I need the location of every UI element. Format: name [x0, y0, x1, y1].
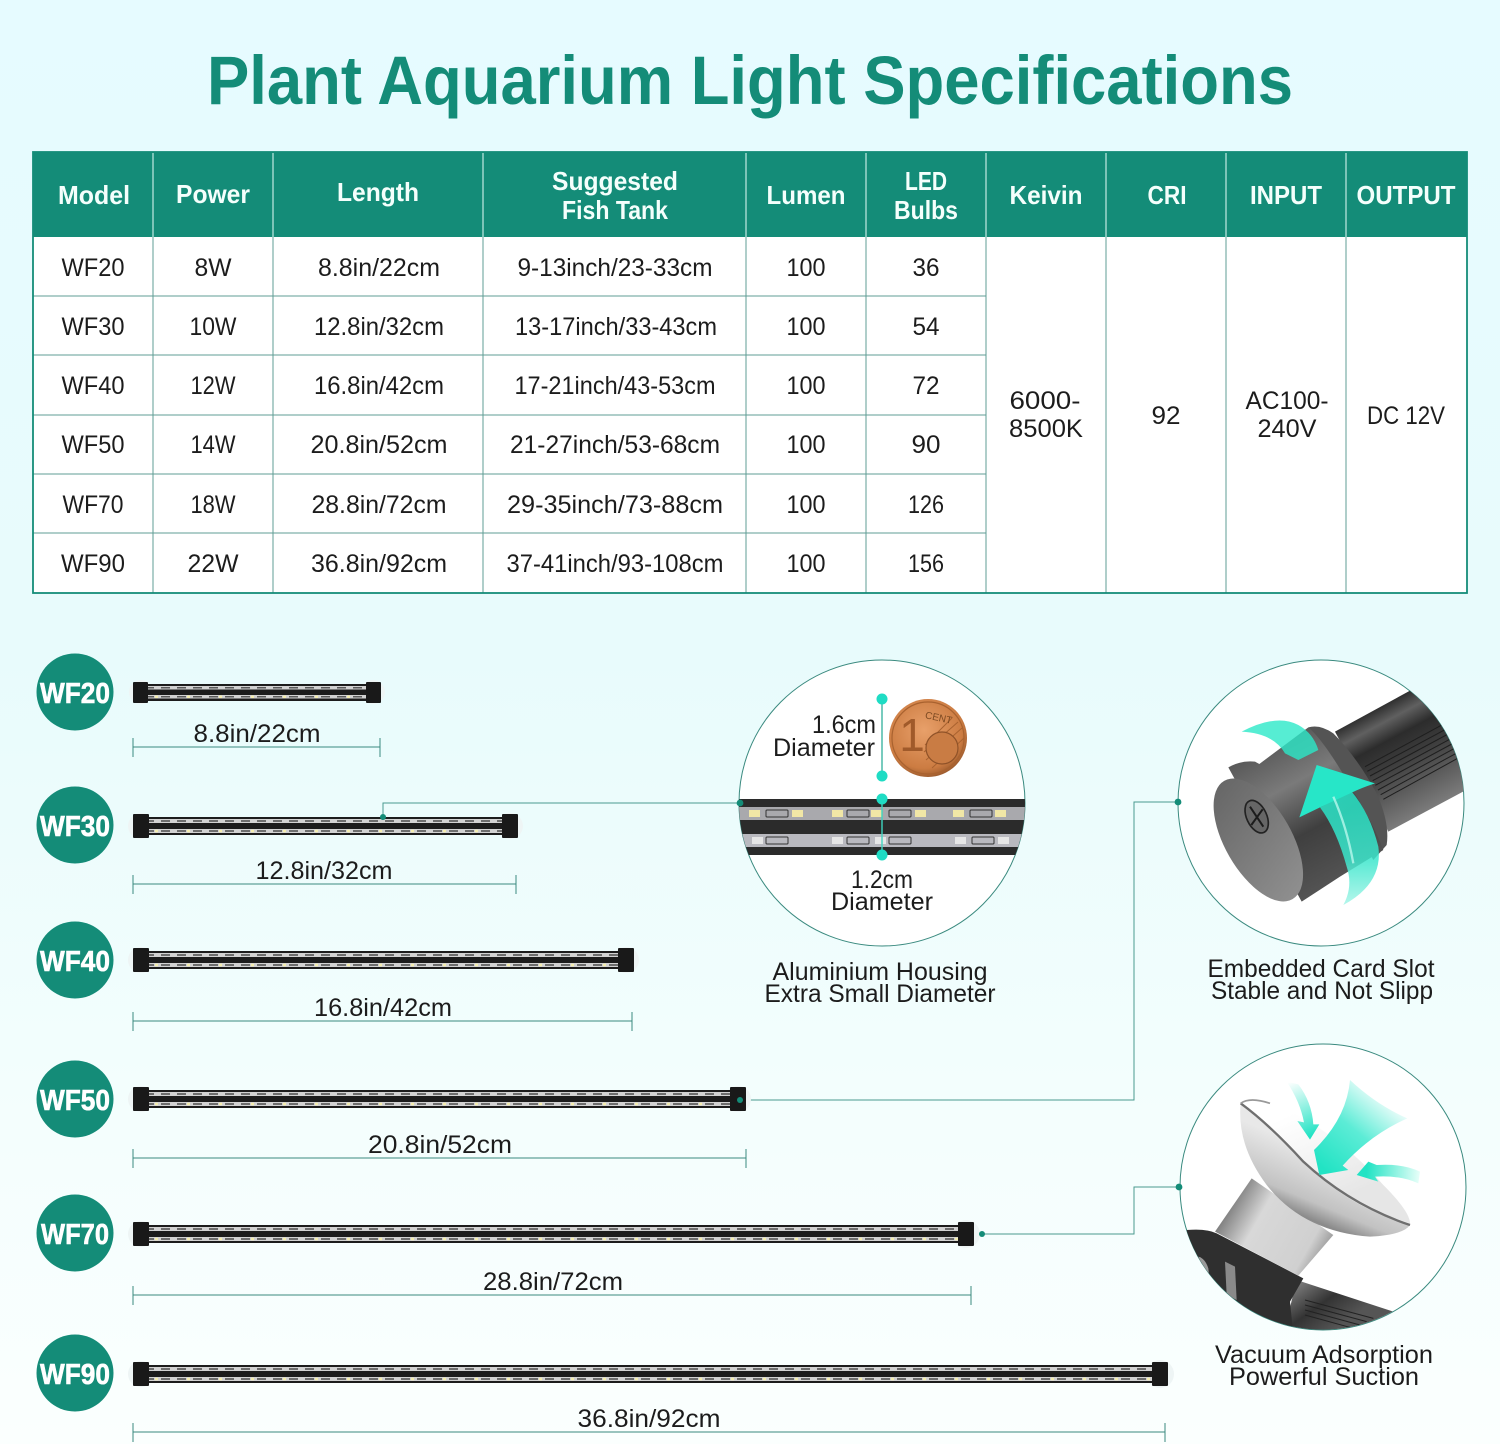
table header labels: Fish Tank	[562, 195, 668, 225]
connector dot	[737, 800, 743, 806]
table data rows: 29-35inch/73-88cm	[507, 491, 723, 519]
table data rows: WF70	[62, 491, 124, 519]
dimension: WF90	[133, 1405, 1165, 1442]
table data rows: WF20	[62, 254, 124, 282]
dimension: WF70: 28.8in/72cm	[483, 1268, 623, 1296]
table data rows: 8.8in/22cm	[318, 254, 440, 282]
model row: WF40	[36, 922, 639, 1031]
caption: vacuum adsorption	[1215, 1341, 1433, 1391]
light bar: WF20	[129, 680, 385, 704]
table data rows: 22W	[188, 550, 239, 578]
table data rows: 16.8in/42cm	[314, 372, 444, 400]
marker dot: WF30	[380, 814, 386, 820]
merged cell: Kelvin: 6000-	[1010, 387, 1080, 415]
badge: WF30	[36, 786, 114, 864]
end cap illustration	[1214, 691, 1464, 902]
table data rows	[61, 254, 944, 578]
merged cell: Kelvin	[1009, 387, 1083, 443]
table header labels: Model	[58, 180, 130, 210]
suction cup illustration	[1187, 1100, 1410, 1335]
table data rows: 126	[908, 491, 944, 519]
caption: aluminium housing: Aluminium Housing	[772, 958, 988, 986]
table data rows: 9-13inch/23-33cm	[518, 254, 712, 282]
label: 1.6cm diameter: 1.6cm	[812, 711, 876, 739]
coin	[889, 699, 967, 777]
table data rows: 100	[786, 372, 826, 400]
marker dot: WF50	[737, 1097, 743, 1103]
badge: WF20	[36, 654, 114, 730]
dimension: WF50	[133, 1131, 746, 1168]
table header labels: Keivin	[1010, 180, 1082, 210]
dimension: WF70	[133, 1268, 971, 1305]
model row: WF20	[36, 654, 385, 757]
table header labels	[58, 166, 1456, 225]
connector dot	[1175, 799, 1181, 805]
label: 1.6cm diameter	[773, 711, 876, 762]
table header labels: Lumen	[766, 180, 846, 210]
light bar: WF50	[128, 1086, 751, 1112]
measurement markers	[876, 694, 888, 860]
model row: WF70	[36, 1194, 985, 1305]
merged cell: input: AC100-	[1246, 387, 1328, 415]
merged cell: input	[1246, 387, 1328, 443]
rotation arrow	[1242, 720, 1379, 905]
close-up of light bar	[735, 799, 1030, 855]
caption: embedded card slot: Stable and Not Slipp	[1211, 977, 1433, 1005]
table data rows: 17-21inch/43-53cm	[514, 372, 716, 400]
caption: aluminium housing	[764, 958, 996, 1008]
light bar: WF70	[128, 1220, 980, 1248]
table header labels: Length	[337, 177, 419, 207]
dimension: WF30: 12.8in/32cm	[256, 857, 392, 885]
dimension: WF40	[133, 994, 632, 1031]
badge: WF50: WF50	[40, 1085, 110, 1117]
label: 1.2cm diameter: 1.2cm	[851, 866, 913, 894]
merged cell: input: 240V	[1258, 415, 1317, 443]
merged cell: CRI: 92	[1152, 402, 1180, 430]
dimension: WF20: 8.8in/22cm	[194, 720, 320, 748]
badge: WF50	[36, 1060, 114, 1138]
caption: embedded card slot	[1208, 955, 1435, 1005]
merged cell: Kelvin: 8500K	[1009, 415, 1083, 443]
table data rows: 28.8in/72cm	[312, 491, 446, 519]
table data rows: 12W	[190, 372, 236, 400]
label: 1.2cm diameter	[831, 866, 933, 916]
label: 1.2cm diameter: Diameter	[831, 888, 933, 916]
merged cell: output: DC 12V	[1367, 402, 1445, 430]
caption: embedded card slot: Embedded Card Slot	[1208, 955, 1435, 983]
table data rows: 100	[786, 313, 826, 341]
badge: WF20: WF20	[40, 678, 110, 710]
table data rows: WF90	[61, 550, 125, 578]
table data rows: WF50	[62, 431, 124, 459]
table data rows: 36	[912, 254, 940, 282]
badge: WF30: WF30	[40, 811, 110, 843]
table data rows: 100	[786, 431, 826, 459]
table header labels: LED	[905, 166, 947, 196]
table data rows: 36.8in/92cm	[311, 550, 447, 578]
badge: WF90: WF90	[40, 1359, 110, 1391]
table data rows: 37-41inch/93-108cm	[506, 550, 724, 578]
table data rows: 21-27inch/53-68cm	[510, 431, 720, 459]
light bar: WF90	[128, 1360, 1174, 1388]
detail circle: embedded card slot	[1175, 660, 1482, 946]
table header labels: INPUT	[1250, 180, 1322, 210]
badge: WF70: WF70	[41, 1219, 109, 1251]
model row: WF50	[36, 1060, 751, 1168]
table data rows: 10W	[190, 313, 237, 341]
coin: CENT	[924, 710, 953, 727]
title: Plant Aquarium Light Specifications	[207, 42, 1293, 119]
caption: vacuum adsorption: Powerful Suction	[1229, 1363, 1419, 1391]
connector lines	[383, 802, 1179, 1234]
connector dot	[1176, 1184, 1182, 1190]
badge: WF70	[36, 1194, 114, 1272]
model row: WF90	[36, 1334, 1174, 1442]
marker dot: WF70	[979, 1231, 985, 1237]
caption: aluminium housing: Extra Small Diameter	[764, 980, 996, 1008]
detail circle: vacuum adsorption	[1176, 1044, 1466, 1335]
dimension: WF40: 16.8in/42cm	[314, 994, 452, 1022]
dimension: WF50: 20.8in/52cm	[368, 1131, 512, 1159]
specification table	[33, 152, 1467, 593]
badge: WF40	[36, 922, 114, 998]
table data rows: 72	[912, 372, 940, 400]
model row: WF30	[36, 786, 523, 894]
table data rows: 100	[786, 550, 826, 578]
dimension: WF90: 36.8in/92cm	[578, 1405, 720, 1433]
dimension: WF20	[133, 720, 380, 757]
table data rows: WF30	[62, 313, 124, 341]
table data rows: 8W	[194, 254, 232, 282]
table data rows: 90	[912, 431, 940, 459]
detail circle: aluminium housing diameter	[735, 660, 1030, 946]
suction arrows	[1287, 1080, 1420, 1183]
badge: WF40: WF40	[40, 946, 110, 978]
table header labels: Bulbs	[894, 195, 958, 225]
caption: vacuum adsorption: Vacuum Adsorption	[1215, 1341, 1433, 1369]
table header labels: Suggested	[552, 166, 678, 196]
table header band	[33, 152, 1467, 237]
table body panel	[33, 152, 1467, 593]
table data rows: 12.8in/32cm	[314, 313, 444, 341]
table data rows: WF40	[62, 372, 124, 400]
table data rows: 20.8in/52cm	[310, 431, 448, 459]
dimension: WF30	[133, 857, 516, 894]
light bar: WF30	[128, 813, 523, 839]
coin: 1	[899, 709, 925, 761]
table data rows: 100	[786, 254, 826, 282]
label: 1.6cm diameter: Diameter	[773, 734, 875, 762]
table data rows: 156	[908, 550, 944, 578]
table data rows: 18W	[190, 491, 236, 519]
table header labels: Power	[176, 179, 250, 209]
table header labels: OUTPUT	[1356, 180, 1456, 210]
table data rows: 13-17inch/33-43cm	[515, 313, 717, 341]
table data rows: 54	[912, 313, 940, 341]
table data rows: 100	[786, 491, 826, 519]
table header labels: CRI	[1148, 180, 1186, 210]
light bar: WF40	[128, 947, 639, 973]
table data rows: 14W	[190, 431, 236, 459]
badge: WF90	[36, 1334, 114, 1412]
